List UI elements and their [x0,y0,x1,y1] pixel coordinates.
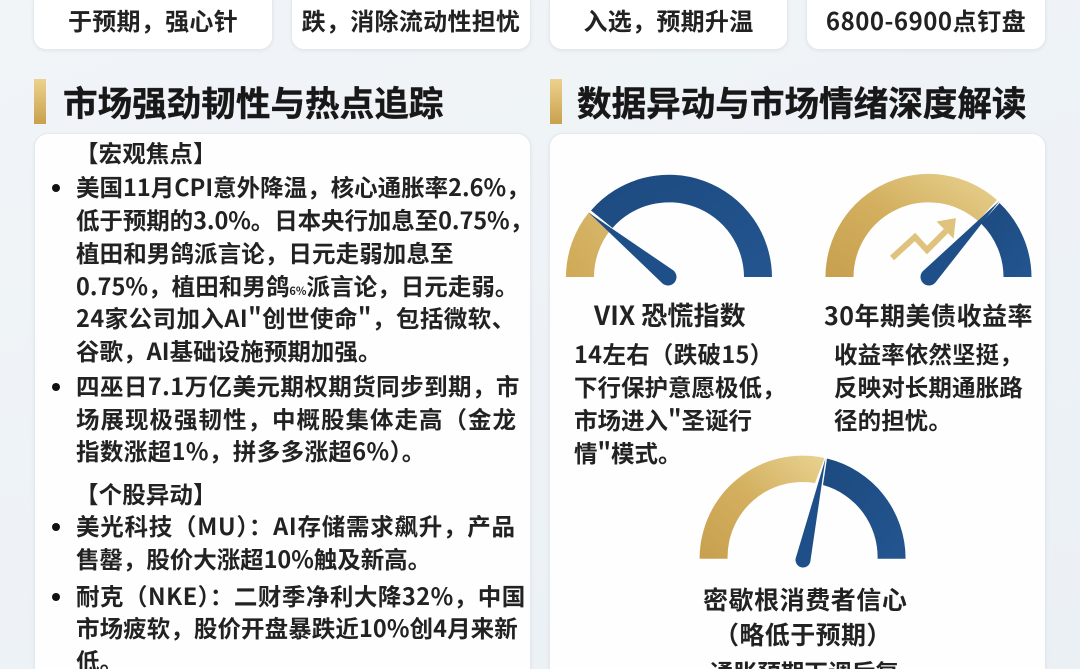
text: macro news: 0.75%，植田和男鸽6%派言论，日元走弱。 [76,268,518,302]
heading: right section: 数据异动与市场情绪深度解读 [577,76,1027,126]
text: micron: 售罄，股价大涨超10%触及新高。 [76,541,431,575]
heading accent: left [34,79,46,124]
label: VIX: VIX 恐慌指数 [594,296,746,333]
text: yield reading: 反映对长期通胀路 [834,369,1023,403]
text: VIX reading: 市场进入"圣诞行 [574,402,752,436]
heading: left section: 市场强劲韧性与热点追踪 [63,76,443,126]
text: options expiry [76,368,520,467]
card: index range [806,0,1046,50]
text: nike: 耐克（NKE）：二财季净利大降32%，中国 [76,578,526,612]
card: strong shot [33,0,273,50]
text: nike: 市场疲软，股价开盘暴跌近10%创4月来新 [76,610,518,644]
text: macro news: 植田和男鸽派言论，日元走弱加息至 [76,235,454,269]
card: liquidity: 跌，消除流动性担忧 [302,2,520,37]
text: VIX reading: 情"模式。 [574,435,682,469]
bullet: micron [52,523,60,531]
text: yield reading: 收益率依然坚挺， [834,336,1023,370]
text: yield reading [834,336,1023,436]
text: macro news [76,169,531,367]
heading accent: right [550,79,562,124]
icon: rising arrow [892,219,955,258]
gauge: 30-year yield [825,174,1032,289]
subheading: macro focus: 【宏观焦点】 [75,135,217,169]
text: micron: 美光科技（MU）：AI存储需求飙升，产品 [76,508,516,542]
text: options expiry: 场展现极强韧性，中概股集体走高（金龙 [76,401,517,435]
card: expectations: 入选，预期升温 [583,2,754,37]
label: below expectations: （略低于预期） [714,616,892,652]
card: index range: 6800-6900点钉盘 [826,2,1026,37]
card: liquidity [291,0,531,50]
bullet: nike [52,593,60,601]
gauge: VIX [566,175,772,289]
text: macro news: 美国11月CPI意外降温，核心通胀率2.6%， [76,169,530,203]
text: micron [76,508,516,575]
subheading: stock moves: 【个股异动】 [75,476,217,510]
text: yield reading: 径的担忧。 [834,402,952,436]
bullet: options [52,383,60,391]
bullet: macro [52,184,60,192]
text: VIX reading: 14左右（跌破15） [574,336,773,370]
text: options expiry: 指数涨超1%，拼多多涨超6%）。 [76,433,426,467]
label: 30-year yield: 30年期美债收益率 [824,297,1033,333]
text: nike [76,578,526,669]
text: macro news: 24家公司加入AI"创世使命"，包括微软、 [76,300,516,334]
panel: market resilience [34,133,531,669]
text: macro news: 谷歌，AI基础设施预期加强。 [76,333,382,367]
text: VIX reading: 下行保护意愿极低， [574,369,786,403]
card: strong shot: 于预期，强心针 [68,2,238,37]
card: expectations [549,0,788,50]
panel: data and sentiment [549,133,1046,669]
text: VIX reading [574,336,786,469]
text: options expiry: 四巫日7.1万亿美元期权期货同步到期，市 [76,368,520,402]
text: macro news: 低于预期的3.0%。日本央行加息至0.75%， [76,202,531,236]
label: Michigan sentiment: 密歇根消费者信心 [703,581,907,617]
gauge: Michigan sentiment [700,456,906,569]
